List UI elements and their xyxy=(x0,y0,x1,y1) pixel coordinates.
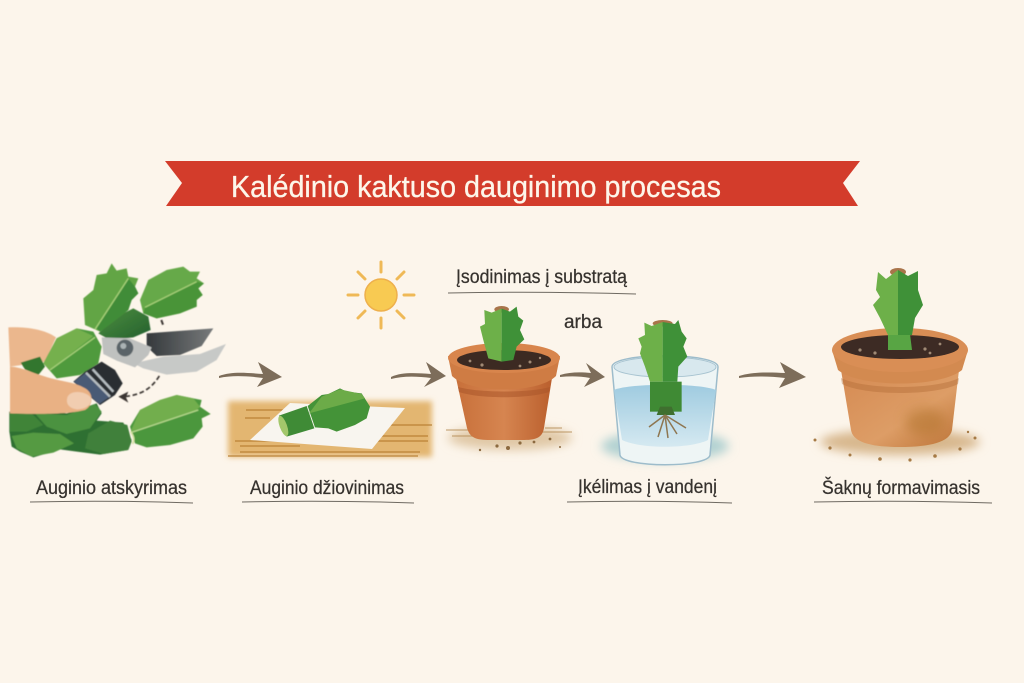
bottom leaves cluster xyxy=(9,403,132,457)
terracotta pot xyxy=(448,343,560,440)
wooden table xyxy=(228,401,432,457)
cut segment xyxy=(130,395,211,447)
drying cutting xyxy=(276,388,370,437)
step 2 illustration: drying on paper xyxy=(228,388,432,457)
label: step 4: Šaknų formavimasis xyxy=(822,477,980,499)
top right leaf xyxy=(140,267,204,318)
thumb xyxy=(10,367,92,414)
leaf between fingers xyxy=(21,357,45,375)
step 4 illustration: rooted plant in pot xyxy=(814,268,980,462)
title banner: Kalédinio kaktuso dauginimo procesas xyxy=(231,169,721,204)
arrow 1 xyxy=(219,362,282,387)
title banner xyxy=(165,161,860,206)
arrow 2 xyxy=(391,362,446,387)
dark leaf behind pruners xyxy=(98,308,151,340)
cutting in water xyxy=(638,320,687,415)
soil scatter xyxy=(446,426,572,451)
icon: sun xyxy=(348,262,414,328)
label: step 1: Auginio atskyrimas xyxy=(36,478,187,499)
plant xyxy=(873,268,923,350)
top leaf xyxy=(83,263,138,332)
large terracotta pot xyxy=(832,328,968,447)
middle leaf xyxy=(43,328,102,378)
step 1 illustration: cutting a segment with pruners xyxy=(8,263,226,457)
cutting xyxy=(480,306,524,362)
glass xyxy=(612,356,718,465)
label: step 2: Auginio džiovinimas xyxy=(250,478,404,499)
arrow 3 xyxy=(560,363,605,387)
label: step 3b: Įkélimas į vandenį xyxy=(578,477,717,498)
fingers of the hand xyxy=(8,327,56,367)
text: or: arba xyxy=(564,312,602,333)
step 3a illustration: potted cutting xyxy=(446,306,572,451)
paper sheet xyxy=(250,403,405,449)
step 3b illustration: glass of water xyxy=(601,320,729,465)
soil scatter xyxy=(814,429,980,462)
pruners xyxy=(73,328,226,405)
water shadow xyxy=(601,431,729,461)
heading: planting in substrate: Įsodinimas į substratą xyxy=(456,267,627,288)
arrow 4 xyxy=(739,362,806,388)
dashed cut arrow xyxy=(118,320,163,403)
roots xyxy=(649,415,686,438)
